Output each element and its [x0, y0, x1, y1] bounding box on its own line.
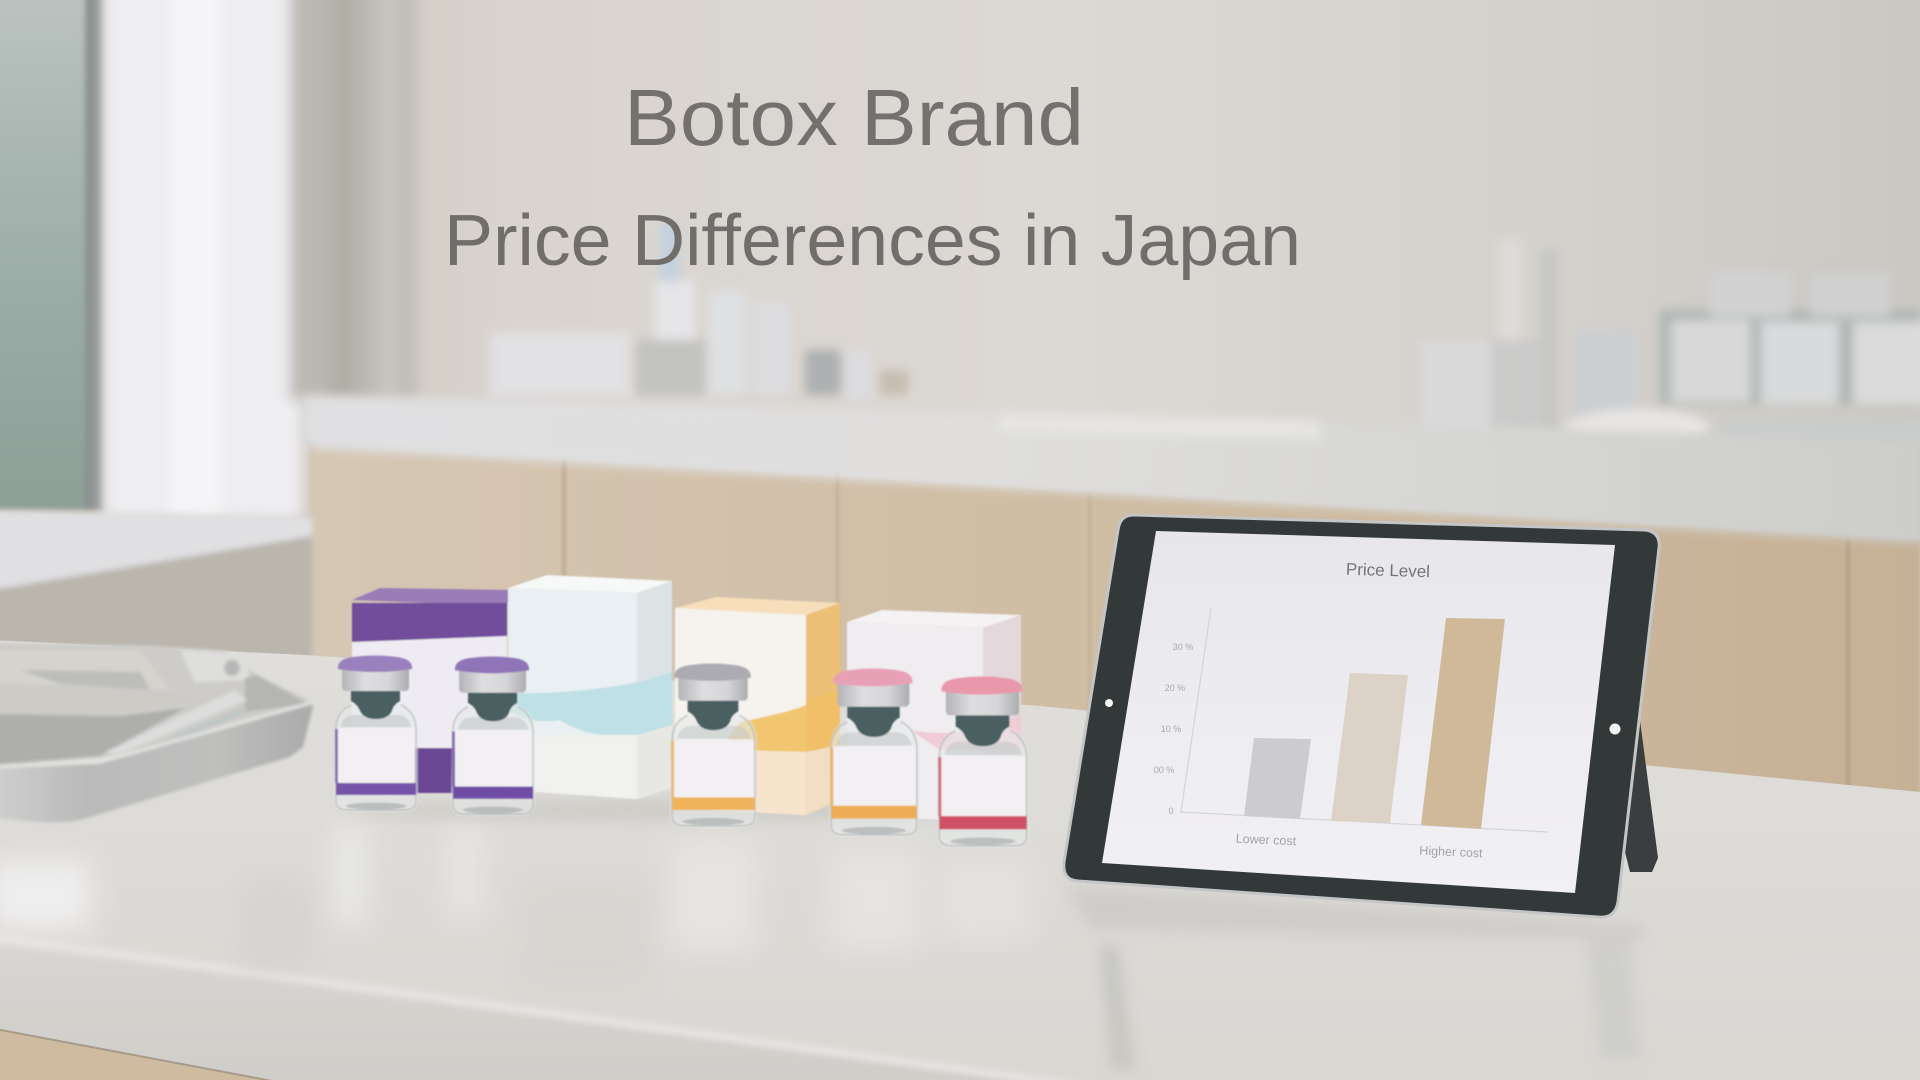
- curtains: [103, 0, 415, 520]
- vials: [334, 656, 1029, 848]
- title line 2: Price Differences in Japan: [444, 201, 1301, 281]
- folded cloth: [0, 650, 170, 690]
- bar: higher cost: [1421, 618, 1505, 829]
- teal and white box: [508, 575, 672, 799]
- bar: mid cost: [1331, 673, 1408, 823]
- y axis labels: [1154, 642, 1193, 816]
- tablet screen: [1102, 531, 1615, 893]
- pink box: [847, 610, 1021, 822]
- purple box: [352, 588, 510, 793]
- vial: amber: [670, 664, 757, 828]
- y axis labels: 30 %: [1173, 642, 1193, 652]
- blurred shelf products left: [490, 222, 908, 400]
- marble table: [0, 640, 1920, 1080]
- box shadow: [340, 798, 1020, 822]
- title: [444, 73, 1301, 281]
- chart title: Price Level: [1346, 560, 1430, 581]
- title line 1: Botox Brand: [624, 73, 1084, 162]
- wood base lower left: [0, 1028, 320, 1080]
- label: higher cost: Higher cost: [1419, 844, 1483, 860]
- tablet with price chart: [1064, 515, 1659, 917]
- window: [0, 0, 103, 510]
- surgical tray: [0, 643, 314, 822]
- wood cabinets: [310, 445, 1920, 800]
- y axis labels: 20 %: [1165, 683, 1185, 693]
- camera dots: [1105, 699, 1620, 734]
- instruments: [105, 690, 247, 755]
- tray wall: [0, 702, 314, 822]
- tablet shadow and reflection: [1065, 885, 1650, 1070]
- blurred shelf products right: [1420, 240, 1920, 447]
- tablet body: [1064, 515, 1659, 917]
- vial: pink: [937, 677, 1029, 848]
- label: lower cost: Lower cost: [1235, 832, 1297, 848]
- back counter: [304, 395, 1920, 543]
- vial: purple 2: [451, 657, 535, 816]
- table front edge: [0, 937, 1100, 1080]
- vial: orange with pink cap: [829, 669, 919, 837]
- side ledge: [0, 510, 312, 665]
- vial: purple 1: [334, 656, 418, 812]
- y axis labels: 0: [1168, 806, 1174, 816]
- chart axes: [1181, 608, 1548, 832]
- table reflections: [0, 825, 1030, 990]
- y axis labels: 10 %: [1161, 724, 1181, 734]
- y axis labels: 00 %: [1154, 765, 1174, 775]
- medicine boxes: [340, 575, 1021, 822]
- orange box: [675, 597, 840, 815]
- bar: lower cost: [1244, 738, 1311, 819]
- tablet stand: [1612, 720, 1658, 872]
